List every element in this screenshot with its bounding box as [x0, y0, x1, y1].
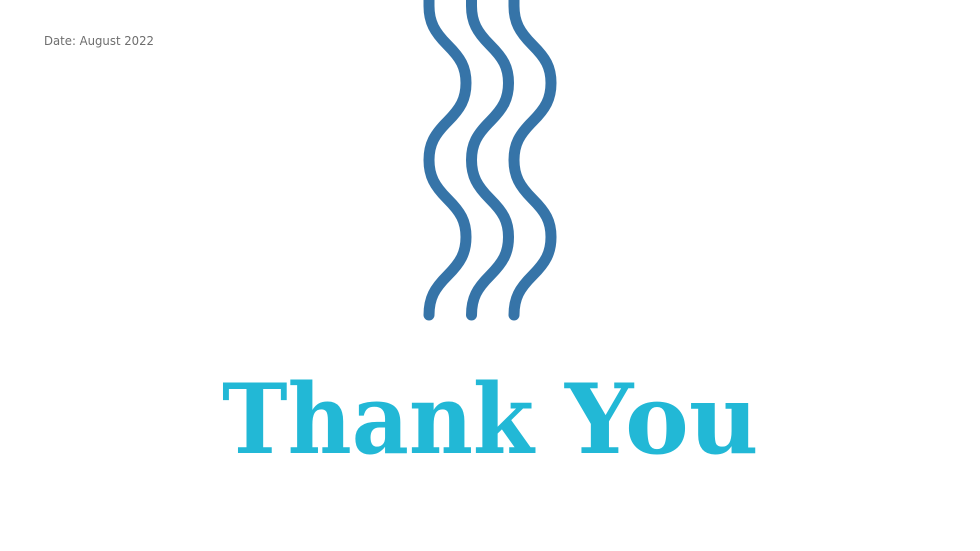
title: You — [564, 363, 758, 476]
title: Thank — [222, 363, 536, 476]
date label: Date: August 2022 — [44, 33, 154, 48]
icon: three waves — [429, 0, 551, 315]
title — [222, 363, 758, 476]
